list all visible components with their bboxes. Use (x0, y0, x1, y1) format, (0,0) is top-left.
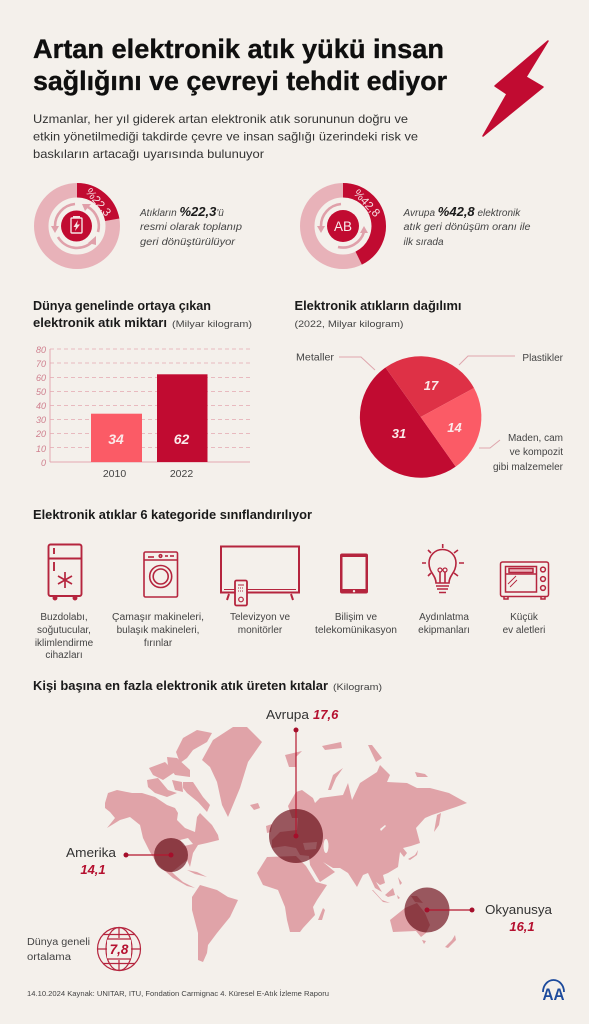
donut: Europe 42.8: %42,8 (351, 188, 382, 220)
icon: globe 7,8: 7,8 (110, 942, 129, 957)
bar: 2010: 2010 (103, 468, 126, 480)
icon: washing machine (144, 552, 178, 597)
icon: light bulb (422, 544, 464, 592)
heading: pie chart (294, 299, 462, 330)
marker: Amerika: Amerika (66, 845, 117, 860)
logo: AA: AA (542, 985, 564, 1004)
marker: Amerika (66, 838, 188, 877)
bar chart: 30 (36, 415, 46, 425)
donut: Europe 42.8 (307, 188, 382, 262)
callout: 22.3: Atıkların %22,3'ü (139, 204, 224, 219)
category labels: telekomünikasyon (315, 625, 397, 636)
marker: Avrupa (266, 707, 339, 863)
category labels: Küçük (510, 612, 539, 623)
title: Artan elektronik atık yükü insan (33, 34, 444, 64)
bar chart (35, 345, 250, 480)
intro text: baskıların artacağı uyarısında bulunuyor (33, 147, 264, 161)
callout: 42.8 (402, 204, 531, 248)
marker: Avrupa: 17,6 (313, 707, 339, 722)
heading: pie chart: (2022, Milyar kilogram) (294, 319, 404, 330)
heading: pie chart: Elektronik atıkların dağılımı (294, 299, 462, 313)
inland seas (180, 825, 386, 853)
donut: recycling rate 22.3 (41, 186, 113, 262)
islands (187, 742, 456, 948)
category labels: Bilişim ve (335, 612, 378, 623)
bar chart: 60 (36, 373, 46, 383)
bar chart: 0 (41, 458, 46, 468)
category labels: monitörler (238, 625, 283, 636)
marker: Amerika: 14,1 (80, 862, 106, 877)
pie chart: 31 (392, 426, 406, 441)
pie chart: ve kompozit (510, 447, 563, 458)
category labels: ekipmanları (418, 625, 470, 636)
title: sağlığını ve çevreyi tehdit ediyor (33, 66, 447, 96)
category labels: cihazları (45, 650, 83, 661)
north america (105, 790, 219, 888)
icon: tablet (340, 554, 368, 594)
marker: Okyanusya: 16,1 (509, 919, 535, 934)
callout: 42.8: atık geri dönüşüm oranı ile (404, 222, 531, 233)
callout: 22.3: resmi olarak toplanıp (140, 222, 242, 233)
title (33, 34, 447, 96)
pie chart: gibi malzemeler (493, 462, 564, 473)
heading: bar chart (33, 299, 252, 330)
south america (192, 885, 238, 962)
bar: 2010 (91, 414, 142, 480)
category labels: Aydınlatma (419, 612, 469, 623)
global average label: ortalama (27, 952, 71, 963)
marker: Okyanusya: Okyanusya (485, 902, 553, 917)
pie chart: 17 (424, 378, 439, 393)
world map (105, 727, 467, 962)
pie chart: Metaller (296, 352, 335, 364)
category labels: Televizyon ve (230, 612, 290, 623)
icon: globe 7,8 (98, 928, 140, 970)
greenland (202, 727, 262, 817)
bar chart: 50 (36, 387, 46, 397)
bar: 2022 (157, 374, 208, 480)
global average label: Dünya geneli (27, 937, 90, 948)
category labels: soğutucular, (37, 625, 91, 636)
category labels (35, 612, 545, 661)
intro text: Uzmanlar, her yıl giderek artan elektronik atık sorununun doğru ve (33, 112, 408, 126)
source: 14.10.2024 Kaynak: UNITAR, ITU, Fondation Carmignac 4. Küresel E-Atık İzleme Raporu (27, 989, 329, 998)
category labels: iklimlendirme (35, 638, 94, 649)
donut: recycling rate 22.3: %22,3 (83, 186, 113, 219)
bar chart: 40 (36, 401, 46, 411)
global average label (27, 937, 90, 963)
intro text (33, 112, 418, 161)
category labels: ev aletleri (503, 625, 545, 636)
heading: bar chart: Dünya genelinde ortaya çıkan (33, 299, 211, 313)
marker: Avrupa: Avrupa (266, 707, 310, 722)
icon: lightning bolt (483, 41, 548, 136)
icon: fridge (48, 544, 82, 600)
heading: map: Kişi başına en fazla elektronik atık üreten kıtalar (33, 679, 328, 693)
arctic islands (147, 730, 212, 812)
marker: Okyanusya (404, 888, 553, 934)
intro text: etkin yönetilmediği takdirde çevre ve insan sağlığı üzerindeki risk ve (33, 130, 418, 144)
pie chart (296, 352, 564, 478)
category labels: bulaşık makineleri, (117, 625, 199, 636)
bar chart: 80 (36, 345, 46, 355)
australia (390, 903, 430, 937)
pie chart: 14 (447, 420, 462, 435)
bar: 2010: 34 (108, 431, 124, 447)
donut: Europe 42.8: AB (334, 219, 352, 234)
heading: categories: Elektronik atıklar 6 kategoride sınıflandırılıyor (33, 508, 312, 522)
bar: 2022: 62 (174, 431, 189, 447)
bar chart: 20 (35, 429, 46, 439)
category labels: fırınlar (144, 638, 173, 649)
icon: oven (500, 562, 548, 599)
callout: 42.8: Avrupa %42,8 elektronik (402, 204, 521, 219)
bar: 2022: 2022 (170, 468, 193, 480)
heading: map: (Kilogram) (333, 682, 382, 693)
callout: 22.3 (139, 204, 242, 248)
heading: bar chart: elektronik atık miktarı (33, 316, 167, 330)
eurasia (272, 765, 467, 892)
callout: 42.8: ilk sırada (404, 237, 444, 248)
bar chart: 10 (36, 444, 46, 454)
pie chart: Maden, cam (508, 433, 563, 444)
pie chart: Plastikler (522, 353, 564, 364)
category labels: Çamaşır makineleri, (112, 612, 204, 623)
bar chart: 70 (36, 359, 46, 369)
icon: television (221, 546, 299, 606)
category labels: Buzdolabı, (40, 612, 88, 623)
heading: bar chart: (Milyar kilogram) (172, 319, 252, 330)
africa (257, 856, 327, 932)
callout: 22.3: geri dönüştürülüyor (140, 237, 236, 248)
